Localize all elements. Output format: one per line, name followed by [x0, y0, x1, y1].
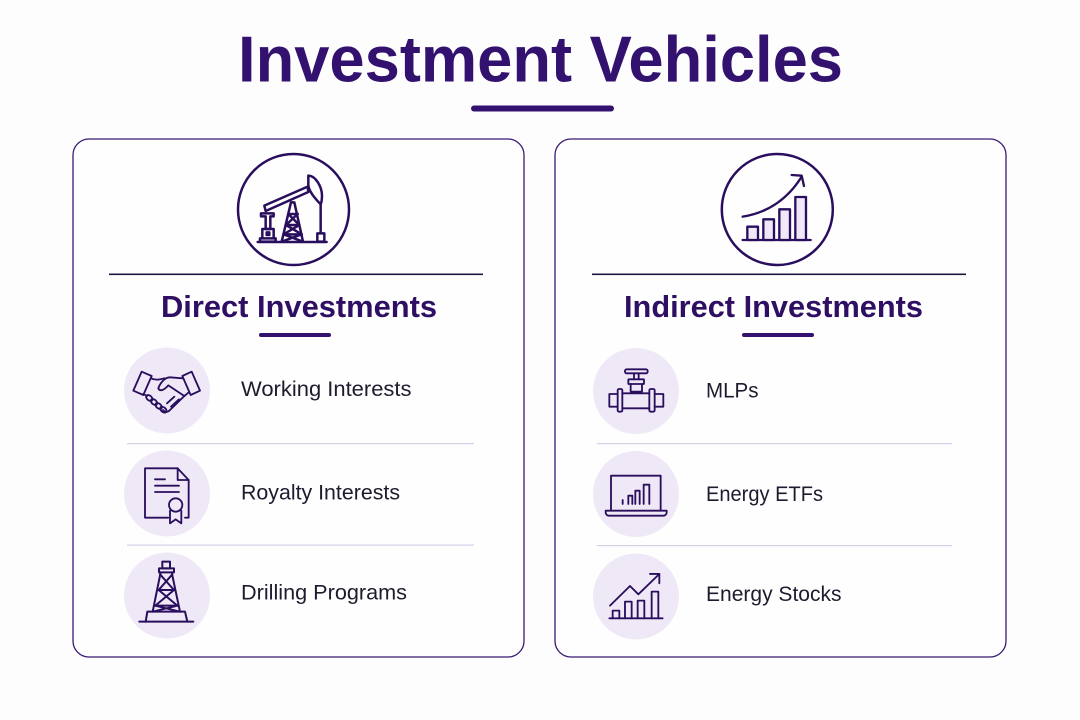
heading: direct investments: Direct Investments — [161, 289, 437, 324]
label: working interests: Working Interests — [241, 377, 412, 401]
label: energy stocks: Energy Stocks — [706, 582, 842, 606]
title underline — [471, 106, 614, 112]
heading: indirect investments: Indirect Investments — [624, 289, 923, 324]
title: Investment Vehicles — [238, 22, 843, 96]
item: energy stocks — [593, 554, 679, 640]
header rule — [109, 274, 483, 275]
panel frame — [555, 139, 1006, 657]
label: drilling programs: Drilling Programs — [241, 580, 407, 604]
item: drilling programs — [124, 552, 210, 638]
panel frame — [73, 139, 524, 657]
heading underline — [742, 333, 814, 337]
label: MLPs: MLPs — [706, 378, 758, 402]
item: royalty interests — [124, 450, 210, 536]
label: energy ETFs: Energy ETFs — [706, 482, 823, 506]
item: energy ETFs — [593, 451, 679, 537]
label: royalty interests: Royalty Interests — [241, 480, 400, 504]
panel: direct investments — [73, 139, 524, 657]
heading underline — [259, 333, 331, 337]
icon: growth chart — [722, 154, 833, 265]
item: working interests — [124, 348, 210, 434]
item: MLPs — [593, 348, 679, 434]
header rule — [592, 274, 966, 275]
icon: pump jack — [238, 154, 349, 265]
panel: indirect investments — [555, 139, 1006, 657]
